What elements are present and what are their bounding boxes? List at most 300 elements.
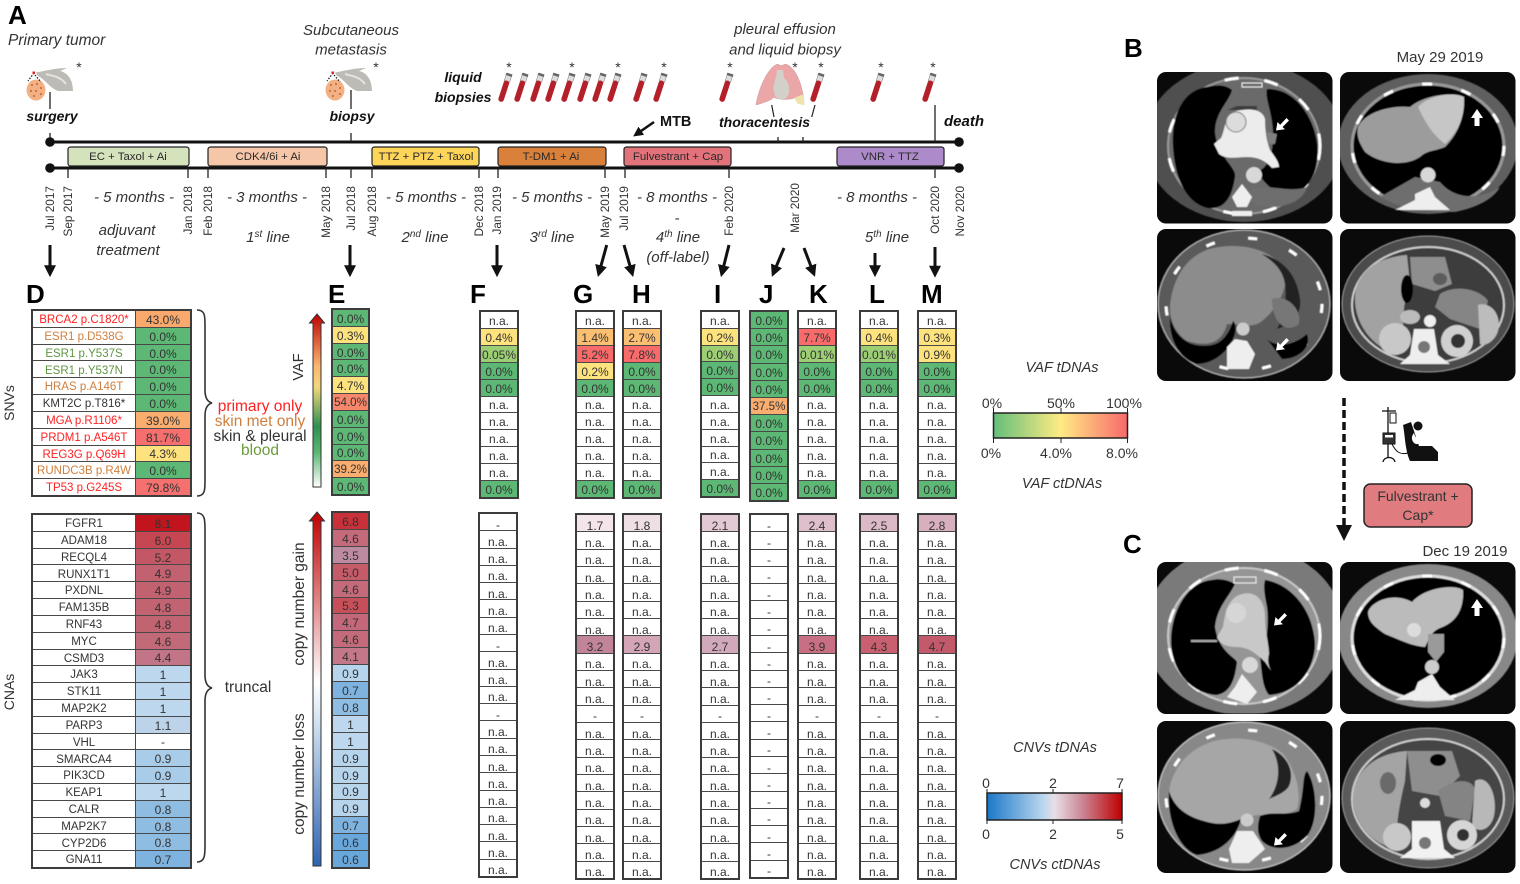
panel D: CNA table: VHL [73, 737, 95, 749]
treatment durations and lines: - 5 months - [386, 189, 466, 206]
panel D: CNA table: GNA11 [66, 854, 102, 866]
label: surgery: surgery [26, 108, 79, 124]
panel D: CNA table: 6.0 [155, 534, 171, 548]
panel I: SNV column: 0.0% [706, 482, 734, 496]
legend: CNV colour scale: CNVs tDNAs [1013, 740, 1097, 756]
panel F: SNV column: n.a. [489, 415, 509, 429]
panel J: SNV column: 0.0% [755, 452, 783, 466]
panel D: CNA table: JAK3 [70, 669, 98, 681]
panel E: CNA column [331, 511, 370, 869]
panel M: SNV column: n.a. [927, 415, 947, 429]
panel D: CNA table: 1 [160, 668, 166, 682]
panel J: SNV column: 0.0% [755, 366, 783, 380]
panel D: CNA table: PIK3CD [63, 770, 105, 782]
panel letter L: L [869, 279, 885, 309]
panel E: SNV column: 4.7% [337, 379, 364, 393]
panel G: SNV column: 5.2% [581, 348, 609, 362]
panel D: CNA table: PARP3 [66, 720, 102, 732]
panel D: CNA table: 0.8 [155, 803, 171, 817]
CT scan B3: liver [1157, 229, 1332, 381]
panel D: CNA table: CALR [69, 804, 99, 816]
label: biopsy: biopsy [329, 108, 376, 124]
panel M: SNV column: n.a. [927, 398, 947, 412]
panel E: SNV column: 0.0% [337, 362, 364, 376]
panel F: SNV column: 0.0% [485, 365, 513, 379]
panel M: SNV column: 0.0% [923, 382, 951, 396]
panel E: SNV column: 0.0% [337, 312, 364, 326]
timeline dates: Jul 2018 [344, 186, 358, 231]
panel J: SNV column: 0.0% [755, 331, 783, 345]
treatment durations and lines: line [547, 229, 574, 246]
panel J: SNV column: 0.0% [755, 486, 783, 500]
icon group: asterisks for sequenced samples: * [818, 59, 824, 75]
panel letter I: I [714, 279, 721, 309]
treatment durations and lines: - 5 months - [512, 189, 592, 206]
panel L: SNV column: n.a. [869, 415, 889, 429]
panel D: CNA table: 1 [160, 786, 166, 800]
panel D: CNA table: 1 [160, 702, 166, 716]
panel L: SNV column: 0.0% [865, 365, 893, 379]
panel M: SNV column [917, 310, 957, 499]
legend: mutation origin [213, 398, 307, 459]
panel G: SNV column: n.a. [585, 314, 605, 328]
CT scan B1: chest [1157, 72, 1332, 224]
panel D: SNV table [31, 309, 192, 497]
text: pleural effusion and liquid biopsy: and liquid biopsy [729, 42, 842, 58]
legend: mutation origin: primary only [218, 398, 302, 415]
legend: CNV colour scale: 7 [1116, 775, 1124, 791]
text: primary tumor: Primary tumor [8, 32, 106, 49]
arrow scale: VAF [310, 314, 324, 487]
panel H: CNA column [622, 513, 662, 880]
panel H: SNV column [622, 310, 662, 499]
legend: mutation origin: skin met only [215, 413, 305, 430]
CT scan B2: upper liver [1338, 72, 1518, 224]
treatment durations and lines: th [873, 229, 882, 240]
treatment durations and lines: 1 [246, 229, 255, 246]
treatment durations and lines: th [664, 229, 673, 240]
legend: CNV colour scale [982, 740, 1124, 873]
timeline dates: Jan 2018 [181, 186, 195, 235]
panel F: SNV column: 0.05% [482, 348, 516, 362]
label: truncal: truncal [225, 679, 271, 696]
panel E: CNA column: 0.8 [342, 701, 359, 715]
treatment: T-DM1 + Ai [498, 147, 606, 166]
panel I: SNV column: n.a. [710, 415, 730, 429]
panel M: SNV column: n.a. [927, 432, 947, 446]
treatment durations and lines: (off-label) [646, 249, 710, 266]
panel letter B: B [1124, 33, 1143, 63]
panel J: SNV column: 0.0% [755, 417, 783, 431]
treatment durations and lines: 3 [530, 229, 538, 246]
brace: SNVs [197, 310, 212, 496]
panel K: SNV column: n.a. [807, 415, 827, 429]
panel J: SNV column: 0.0% [755, 314, 783, 328]
treatment durations and lines: - 5 months - [94, 189, 174, 206]
panel E: CNA column: 4.1 [342, 650, 359, 664]
panel D: SNV table: 0.0% [149, 347, 177, 360]
legend: mutation origin: skin & pleural [213, 428, 307, 445]
panel E: CNA column: 5.3 [342, 599, 359, 613]
panel K: SNV column: 7.7% [803, 331, 831, 345]
panel D: SNV table: KMT2C p.T816* [43, 398, 125, 410]
panel I: SNV column: n.a. [710, 432, 730, 446]
panel D: CNA table: 4.6 [155, 635, 171, 648]
timeline dates: May 2019 [598, 186, 612, 238]
panel E: CNA column: 6.8 [342, 515, 359, 529]
panel L: SNV column [859, 310, 899, 499]
panel D: CNA table: 1.1 [155, 719, 171, 733]
panel letter G: G [573, 279, 593, 309]
panel G: SNV column: 0.0% [581, 483, 609, 497]
panel D: CNA table: STK11 [67, 686, 101, 698]
panel D: CNA table: - [161, 735, 165, 749]
panel E: CNA column: 3.5 [342, 549, 359, 563]
panel I: SNV column: 0.0% [706, 381, 734, 395]
panel I: SNV column: 0.0% [706, 364, 734, 378]
icon group: blood tubes [497, 73, 937, 103]
panel D: SNV table: 0.0% [149, 464, 177, 478]
panel E: CNA column: 4.6 [342, 583, 359, 597]
date: Dec 19 2019: Dec 19 2019 [1422, 543, 1508, 560]
timeline dates: Jul 2019 [617, 186, 631, 231]
panel E: SNV column: 0.0% [337, 480, 364, 494]
panel M: SNV column: 0.0% [923, 483, 951, 497]
treatment durations and lines: line [882, 229, 909, 246]
panel K: SNV column: 0.0% [803, 483, 831, 497]
panel F: SNV column: n.a. [489, 449, 509, 463]
panel L: SNV column: n.a. [869, 398, 889, 412]
panel E: SNV column [331, 308, 370, 496]
panel G: SNV column: 1.4% [581, 331, 609, 345]
panel H: SNV column: n.a. [632, 415, 652, 429]
icon group: asterisks for sequenced samples: * [727, 59, 733, 75]
panel H: SNV column: n.a. [632, 466, 652, 480]
panel L: SNV column: n.a. [869, 314, 889, 328]
panel L: CNA column [859, 513, 899, 880]
axis label: SNVs: SNVs [1, 385, 17, 421]
treatment: TTZ + PTZ + Taxol [372, 147, 479, 166]
panel letter M: M [921, 279, 943, 309]
panel J: SNV column: 0.0% [755, 383, 783, 397]
panel M: CNA column [917, 513, 957, 880]
timeline dates: Jan 2019 [490, 186, 504, 235]
panel I: SNV column: n.a. [710, 398, 730, 412]
panel K: SNV column [797, 310, 837, 499]
panel M: SNV column: n.a. [927, 314, 947, 328]
panel D: CNA table: 0.9 [155, 769, 171, 783]
timeline dates: Sep 2017 [61, 186, 75, 237]
panel D: CNA table [31, 513, 192, 869]
icon: lungs with effusion [756, 64, 804, 105]
panel D: CNA table: 5.2 [155, 551, 171, 564]
label: liquid biopsies: biopsies [435, 89, 492, 105]
panel D: SNV table: ESR1 p.Y537N [45, 365, 123, 377]
timeline dates: Feb 2018 [201, 186, 215, 236]
treatment: Fulvestrant + Cap: Fulvestrant + Cap [633, 151, 723, 163]
panel D: SNV table: 4.3% [149, 447, 177, 461]
panel H: SNV column: 2.7% [628, 331, 656, 345]
legend: VAF colour scale: 100% [1106, 395, 1142, 411]
label: death: death [944, 113, 984, 130]
panel E: CNA column: 1 [347, 718, 354, 732]
panel D: CNA table: RNF43 [66, 619, 102, 631]
panel H: SNV column: 0.0% [628, 382, 656, 396]
timeline dates: Feb 2020 [722, 186, 736, 236]
treatment: EC + Taxol + Ai: EC + Taxol + Ai [89, 151, 167, 163]
panel L: SNV column: 0.0% [865, 382, 893, 396]
panel G: SNV column: n.a. [585, 398, 605, 412]
legend: VAF colour scale: 8.0% [1106, 445, 1138, 461]
connector: biopsy [350, 90, 352, 109]
treatment durations and lines: rd [538, 229, 547, 240]
panel H: SNV column: 0.0% [628, 483, 656, 497]
panel J: CNA column [749, 513, 789, 879]
legend: CNV colour scale: 5 [1116, 826, 1124, 842]
panel E: CNA column: 0.9 [342, 785, 359, 799]
panel D: CNA table: SMARCA4 [56, 754, 112, 766]
panel M: SNV column: n.a. [927, 449, 947, 463]
label: MTB: MTB [660, 114, 691, 130]
panel D: SNV table: ESR1 p.D538G [44, 331, 124, 343]
panel E: CNA column: 5.0 [342, 566, 359, 580]
legend: mutation origin: blood [241, 442, 279, 459]
timeline dates: Dec 2018 [472, 186, 486, 236]
treatment: CDK4/6i + Ai: CDK4/6i + Ai [236, 151, 300, 163]
panel M: SNV column: 0.9% [923, 348, 951, 362]
panel F: SNV column: 0.4% [485, 331, 513, 345]
panel H: SNV column: n.a. [632, 398, 652, 412]
panel D: CNA table: 1 [160, 685, 166, 699]
treatment durations and lines: line [673, 229, 700, 246]
icon group: asterisks for sequenced samples: * [76, 59, 82, 75]
box: Fulvestrant + Cap*: Cap* [1402, 507, 1434, 523]
treatment: T-DM1 + Ai: T-DM1 + Ai [523, 151, 579, 163]
panel D: CNA table: CSMD3 [64, 653, 104, 665]
panel D: CNA table: PXDNL [65, 585, 103, 597]
legend: CNV colour scale: 0 [982, 775, 990, 791]
panel G: CNA column [575, 513, 615, 880]
CT scan C3: liver after treatment [1157, 721, 1332, 873]
panel G: SNV column: 0.0% [581, 382, 609, 396]
treatment: VNR + TTZ: VNR + TTZ [861, 151, 919, 163]
panel E: CNA column: 0.9 [342, 802, 359, 816]
label: VAF: VAF [291, 353, 307, 381]
panel letter F: F [470, 279, 486, 309]
label: copy number gain: copy number gain [291, 542, 308, 666]
panel F: SNV column [479, 310, 519, 499]
panel I: SNV column: n.a. [710, 465, 730, 479]
icon group: asterisks for sequenced samples [76, 59, 936, 75]
panel K: SNV column: n.a. [807, 432, 827, 446]
treatment timeline bars [45, 105, 964, 178]
treatment durations and lines: nd [410, 229, 421, 240]
panel E: SNV column: 0.0% [337, 446, 364, 460]
panel I: SNV column: 0.0% [706, 348, 734, 361]
panel E: CNA column: 0.6 [342, 836, 359, 850]
timeline dates: Mar 2020 [788, 183, 802, 233]
panel E: CNA column: 4.7 [342, 616, 359, 630]
panel L: SNV column: n.a. [869, 449, 889, 463]
panel M: SNV column: 0.3% [923, 331, 951, 345]
panel D: CNA table: 8.1 [155, 517, 171, 531]
panel F: SNV column: 0.0% [485, 382, 513, 396]
panel E: SNV column: 39.2% [334, 463, 367, 476]
icon group: asterisks for sequenced samples: * [878, 59, 884, 75]
panel L: SNV column: 0.4% [865, 331, 893, 345]
treatment durations and lines: - [674, 210, 680, 227]
CT scan B4: abdomen [1340, 229, 1516, 381]
panel G: SNV column: 0.2% [581, 365, 609, 379]
panel letter H: H [632, 279, 651, 309]
text: pleural effusion and liquid biopsy: pleural effusion [733, 21, 836, 38]
panel D: SNV table: PRDM1 p.A546T [41, 432, 127, 444]
label: thoracentesis: thoracentesis [719, 114, 810, 130]
panel letter C: C [1123, 529, 1142, 559]
panel E: CNA column: 1 [347, 735, 354, 749]
icon: biopsy hand and tissue [326, 68, 372, 100]
panel D: CNA table: 4.8 [155, 618, 171, 632]
CT scan C1: chest after treatment [1157, 562, 1332, 714]
text: subcutaneous metastasis: metastasis [315, 42, 387, 58]
panel letter J: J [759, 279, 773, 309]
panel J: SNV column: 0.0% [755, 469, 783, 483]
panel E: SNV column: 0.3% [337, 329, 364, 343]
icon group: asterisks for sequenced samples: * [615, 59, 621, 75]
panel F: CNA column [478, 512, 518, 878]
panel D: CNA table: FAM135B [59, 602, 109, 614]
legend: VAF colour scale: 50% [1047, 395, 1075, 411]
panel K: CNA column [797, 513, 837, 880]
panel E: SNV column: 0.0% [337, 413, 364, 427]
timeline dates: Jul 2017 [43, 186, 57, 231]
panel D: SNV table: REG3G p.Q69H [42, 449, 126, 461]
icon group: asterisks for sequenced samples: * [373, 59, 379, 75]
treatment durations and lines: 4 [656, 229, 664, 246]
panel E: SNV column: 0.0% [337, 346, 364, 359]
legend: CNV colour scale: 2 [1049, 775, 1057, 791]
panel D: CNA table: MAP2K7 [61, 821, 107, 833]
treatment durations and lines: 2 [402, 229, 410, 246]
panel G: SNV column: n.a. [585, 449, 605, 463]
brace: CNAs [197, 513, 212, 862]
legend: VAF colour scale: 0% [982, 395, 1002, 411]
panel D: CNA table: 4.9 [155, 567, 171, 581]
panel I: SNV column: n.a. [710, 448, 730, 462]
panel D: CNA table: RECQL4 [61, 552, 107, 564]
panel J: SNV column [749, 310, 789, 502]
panel D: CNA table: 4.9 [155, 584, 171, 598]
icon: surgery hand and tissue [26, 68, 73, 100]
panel K: SNV column: 0.0% [803, 365, 831, 379]
treatment durations and lines: line [421, 229, 448, 246]
treatment durations and lines: - 8 months - [637, 189, 717, 206]
icon group: asterisks for sequenced samples: * [661, 59, 667, 75]
panel D: CNA table: KEAP1 [65, 787, 103, 799]
panel E: CNA column: 0.6 [342, 853, 359, 867]
connector: surgery [49, 92, 51, 109]
panel letter D: D [26, 279, 45, 309]
panel E: CNA column: 0.7 [342, 819, 359, 833]
panel D: CNA table: RUNX1T1 [58, 569, 110, 581]
panel D: CNA table: FGFR1 [65, 518, 103, 530]
panel E: CNA column: 0.9 [342, 769, 359, 782]
icon group: asterisks for sequenced samples: * [506, 59, 512, 75]
panel L: SNV column: n.a. [869, 432, 889, 446]
timeline annotations above the bars [8, 21, 984, 134]
panel E: CNA column: 0.9 [342, 752, 359, 766]
legend: VAF colour scale: 0% [981, 445, 1001, 461]
arrow scale: copy number [310, 512, 324, 866]
panel L: SNV column: 0.01% [862, 348, 896, 362]
label: liquid biopsies: liquid [444, 69, 482, 85]
axis label: CNAs: CNAs [1, 674, 17, 710]
legend: VAF colour scale: VAF tDNAs [1025, 360, 1099, 376]
panel D: SNV table: ESR1 p.Y537S [45, 348, 123, 360]
panel G: SNV column: n.a. [585, 432, 605, 446]
treatment durations and lines: 5 [865, 229, 873, 246]
panel M: SNV column: n.a. [927, 466, 947, 480]
panel D: CNA table: 0.7 [155, 853, 171, 867]
panel J: SNV column: 0.0% [755, 434, 783, 448]
panel D: SNV table: RUNDC3B p.R4W [37, 465, 131, 477]
treatment: CDK4/6i + Ai [208, 147, 327, 166]
panel E: CNA column: 4.6 [342, 532, 359, 546]
panel J: SNV column: 37.5% [753, 400, 785, 413]
panel K: SNV column: 0.01% [800, 348, 834, 362]
arrow: MTB [636, 122, 654, 134]
panel letter K: K [809, 279, 828, 309]
treatment durations and lines [94, 189, 917, 266]
panel F: SNV column: 0.0% [485, 483, 513, 497]
panel D: SNV table: 39.0% [146, 414, 180, 428]
timeline dates [43, 183, 967, 238]
panel D: SNV table: TP53 p.G245S [46, 482, 122, 494]
box: Fulvestrant + Cap*: Fulvestrant + [1377, 488, 1459, 504]
treatment: TTZ + PTZ + Taxol: TTZ + PTZ + Taxol [379, 151, 473, 163]
panel E: SNV column: 54.0% [334, 396, 367, 409]
panel I: SNV column [700, 310, 740, 498]
panel K: SNV column: n.a. [807, 314, 827, 328]
icon group: asterisks for sequenced samples: * [792, 59, 798, 75]
panel D: SNV table: 0.0% [149, 380, 177, 394]
timeline dates: Nov 2020 [953, 186, 967, 236]
panel L: SNV column: 0.0% [865, 483, 893, 497]
arrows from timeline to sample columns [50, 245, 935, 274]
panel D: CNA table: 0.9 [155, 752, 171, 766]
treatment durations and lines: - 3 months - [227, 189, 307, 206]
panel D: SNV table: 79.8% [146, 481, 180, 495]
treatment durations and lines: st [255, 229, 264, 240]
panel M: SNV column: 0.0% [923, 365, 951, 379]
panel D: SNV table: HRAS p.A146T [45, 381, 123, 393]
panel H: SNV column: n.a. [632, 449, 652, 463]
panel G: SNV column: n.a. [585, 415, 605, 429]
panel K: SNV column: n.a. [807, 449, 827, 463]
panel F: SNV column: n.a. [489, 466, 509, 480]
panel D: CNA table: MYC [71, 636, 97, 648]
icon group: asterisks for sequenced samples: * [930, 59, 936, 75]
panel K: SNV column: n.a. [807, 466, 827, 480]
panel D: SNV table: 43.0% [146, 313, 180, 327]
panel D: CNA table: 4.8 [155, 601, 171, 615]
panel E: CNA column: 4.6 [342, 633, 359, 647]
panel K: SNV column: 0.0% [803, 382, 831, 396]
panel D: CNA table: MAP2K2 [61, 703, 107, 715]
panel F: SNV column: n.a. [489, 314, 509, 328]
panel I: CNA column [700, 513, 740, 880]
panel D: CNA table: 0.8 [155, 836, 171, 850]
